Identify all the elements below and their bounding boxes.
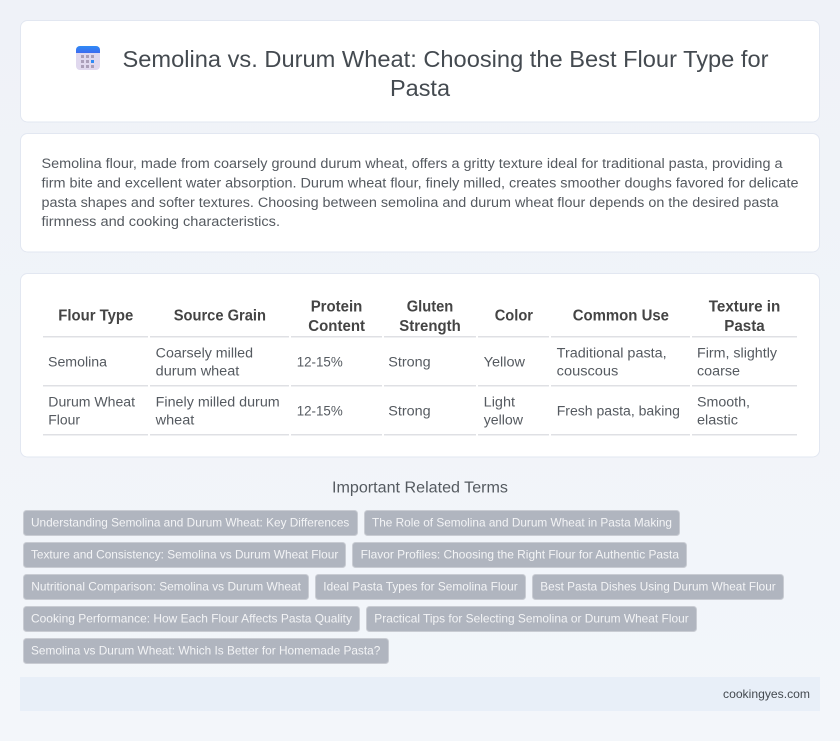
table row: Semolina: Traditional pasta, <box>557 346 667 362</box>
table row: Durum Wheat Flour: Flour <box>48 413 80 429</box>
table header row: Strength <box>399 318 461 335</box>
table header row: Flour Type <box>58 308 134 325</box>
tag <box>532 574 784 600</box>
tag <box>352 542 686 568</box>
table row: Semolina: Semolina <box>48 355 107 371</box>
tag: Understanding Semolina and Durum Wheat: Key Differences <box>31 516 349 530</box>
tag <box>24 638 388 664</box>
tag <box>24 542 346 568</box>
panel: comparison table <box>20 274 820 457</box>
tag: The Role of Semolina and Durum Wheat in Pasta Making <box>372 516 672 530</box>
table row: Durum Wheat Flour: Fresh pasta, baking <box>557 404 680 420</box>
table header row: Texture in <box>709 299 780 316</box>
table row: Durum Wheat Flour: Finely milled durum <box>156 395 280 411</box>
table row: Durum Wheat Flour: 12-15% <box>297 404 343 420</box>
table row: Durum Wheat Flour: Strong <box>388 404 431 420</box>
tag: Cooking Performance: How Each Flour Affects Pasta Quality <box>31 612 352 626</box>
panel: introduction <box>20 134 820 252</box>
tag <box>364 510 680 536</box>
title: Semolina vs. Durum Wheat: Choosing the Best Flour Type for <box>122 46 769 72</box>
title <box>122 46 769 101</box>
tag: Best Pasta Dishes Using Durum Wheat Flour <box>540 580 776 594</box>
table row: Semolina: coarse <box>697 364 740 380</box>
tag: Ideal Pasta Types for Semolina Flour <box>323 580 518 594</box>
table row: Durum Wheat Flour: Durum Wheat <box>48 395 135 411</box>
footer: cookingyes.com <box>723 687 810 701</box>
tag: Flavor Profiles: Choosing the Right Flour for Authentic Pasta <box>361 548 679 562</box>
table row: Semolina: 12-15% <box>297 355 343 371</box>
table row: Durum Wheat Flour: elastic <box>697 413 738 429</box>
table header row: Common Use <box>573 308 669 325</box>
text block: introduction paragraph: Semolina flour, made from coarsely ground durum wheat, offers a gritty texture ideal for traditional pasta, providing a <box>42 156 783 172</box>
table row: Semolina: Firm, slightly <box>697 346 778 362</box>
text block: introduction paragraph: pasta shapes and softer textures. Choosing between semolina and durum wheat flour depends on the desired pasta <box>42 195 779 211</box>
table header row: Color <box>495 308 533 325</box>
table row: Semolina <box>48 346 778 380</box>
title: Pasta <box>390 75 451 101</box>
table row: Durum Wheat Flour: Smooth, <box>697 395 750 411</box>
text block: introduction paragraph: firm bite and excellent water absorption. Durum wheat flour, finely milled, creates smoother doughs favored for delicate <box>42 175 799 191</box>
related term tags <box>24 510 784 664</box>
tag: Practical Tips for Selecting Semolina or Durum Wheat Flour <box>374 612 689 626</box>
tag <box>24 574 308 600</box>
table row: Semolina: Yellow <box>484 355 526 371</box>
table row: Durum Wheat Flour: yellow <box>484 413 524 429</box>
table header row: Protein <box>311 299 362 316</box>
tag: Semolina vs Durum Wheat: Which Is Better for Homemade Pasta? <box>31 644 381 658</box>
icon: calendar <box>76 46 100 70</box>
table row: Semolina: couscous <box>557 364 618 380</box>
tag <box>316 574 526 600</box>
table row: Durum Wheat Flour: Light <box>484 395 515 411</box>
table header row: Pasta <box>724 318 765 335</box>
tag <box>366 606 696 632</box>
header panel <box>20 20 820 122</box>
table row: Durum Wheat Flour: wheat <box>155 413 194 429</box>
tag: Texture and Consistency: Semolina vs Durum Wheat Flour <box>31 548 338 562</box>
footer <box>20 677 820 711</box>
table header row <box>58 299 780 335</box>
table header row: Gluten <box>407 299 453 316</box>
tag: Nutritional Comparison: Semolina vs Durum Wheat <box>31 580 302 594</box>
table row: Semolina: Strong <box>388 355 431 371</box>
table row: Durum Wheat Flour <box>48 395 750 429</box>
table header row: Content <box>308 318 365 335</box>
text block: introduction paragraph: firmness and cooking characteristics. <box>42 214 280 230</box>
text block: introduction paragraph <box>42 156 799 230</box>
table header row: Source Grain <box>174 308 266 325</box>
tag <box>24 510 358 536</box>
heading: related terms: Important Related Terms <box>332 480 508 496</box>
table row: Semolina: durum wheat <box>156 364 239 380</box>
table row: Semolina: Coarsely milled <box>156 346 253 362</box>
tag <box>24 606 360 632</box>
